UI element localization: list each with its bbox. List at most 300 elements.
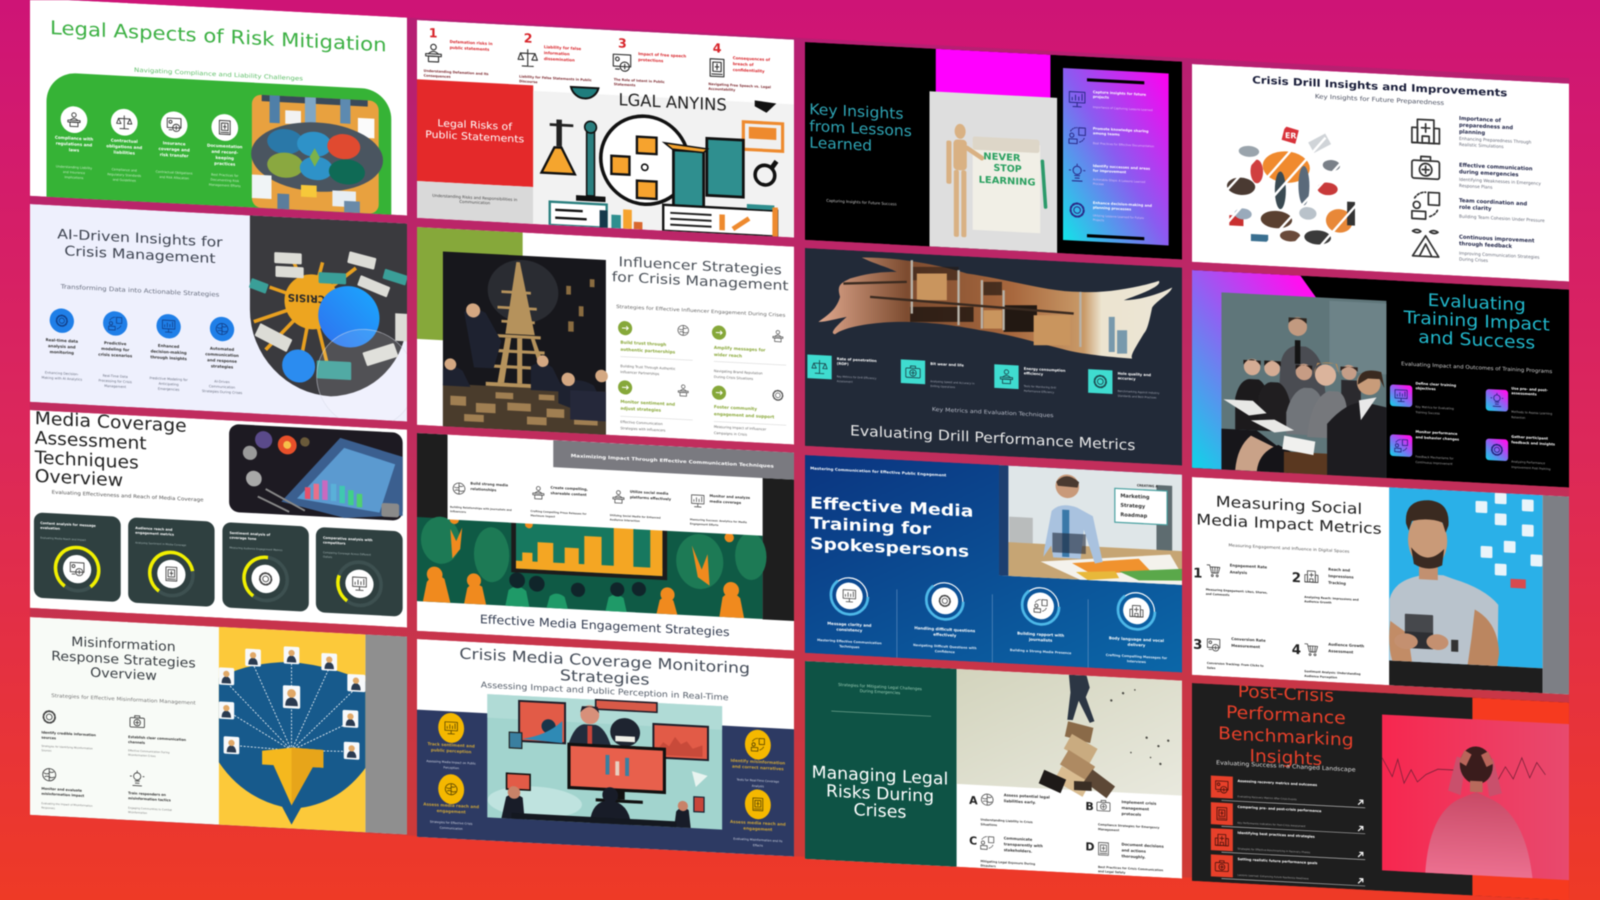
metric descriptions: Performance Efficiency [1024, 389, 1055, 394]
descriptions: Processing for Crisis [98, 379, 132, 384]
metric headings: Energy consumption [1024, 367, 1066, 373]
descriptions: Engagement Efforts [690, 522, 719, 527]
card: sentiment analysis: coverage tone [229, 536, 257, 541]
numbered headings: Navigating Free Speech vs. Legal [708, 82, 771, 89]
headings [1415, 381, 1555, 447]
headings: and actions [1122, 848, 1147, 854]
numbered headings: breach of [733, 61, 754, 67]
gradient list panel: projects [1093, 95, 1109, 100]
title: and Success [1418, 328, 1535, 354]
labels: Build trust through [620, 340, 666, 347]
labels: effectively [933, 632, 957, 638]
card: audience reach: Analyzing Sentiment in Media Coverage [135, 540, 187, 547]
photo: seated trainees [1221, 292, 1386, 478]
illustration: fragmented emergency scene [1216, 112, 1369, 266]
illustration: audience watching chart [417, 513, 767, 619]
gradient icon tiles [1390, 384, 1508, 462]
descriptions: Misinformation [128, 810, 147, 815]
funnel network graphic [219, 627, 365, 832]
card: comparative analysis [316, 527, 403, 617]
card: audience reach: Audience reach and [135, 526, 173, 532]
descriptions: and Legal Safety [1098, 869, 1125, 875]
gradient list panel: Importance of Capturing Lessons Learned [1093, 105, 1153, 112]
descriptions: Audience Perception [1304, 674, 1337, 680]
numbered headings: public statements [450, 45, 490, 52]
descriptions: Continuous Improvement [1415, 460, 1454, 466]
descriptions: Tools for Real-Time Coverage [736, 777, 779, 784]
title: Benchmarking [1218, 724, 1354, 751]
descriptions: Anticipating [159, 382, 179, 387]
numbered headings: Discourse [519, 79, 538, 84]
panel: Misinformation Response Strategies Overview [30, 617, 407, 835]
photo: never stop learning [929, 91, 1057, 253]
labels: consistency [836, 627, 863, 633]
descriptions: Confidence [935, 649, 956, 654]
labels: modeling for [101, 346, 129, 352]
card: comparative analysis: Comparing Coverage Across Different [323, 550, 371, 557]
icons [57, 314, 228, 336]
labels: Body language and vocal [1109, 635, 1165, 643]
headings: objectives [1415, 386, 1436, 391]
descriptions: Responses [41, 805, 56, 810]
descriptions: Evaluating Recovery Metrics After Crisis Events [1238, 794, 1297, 801]
photo: toppling brick stack [957, 669, 1182, 802]
descriptions: Situations [981, 822, 997, 827]
labels: communication [205, 351, 239, 358]
headings [470, 481, 751, 506]
photo: never stop learning: NEVER [983, 151, 1021, 164]
illustration: legal anyins: LGAL ANYINS [618, 90, 727, 115]
descriptions: Strategies for Effective Crisis [430, 820, 473, 826]
labels: Enhanced [158, 343, 180, 349]
numbered headings: Impact of free speech [638, 51, 686, 59]
title [57, 227, 223, 268]
labels: Identify misinformation [731, 758, 785, 766]
arrows [622, 326, 722, 395]
labels: and record- [211, 149, 238, 155]
panel: Post-Crisis Performance Benchmarking Insights [1192, 679, 1569, 900]
headings: media coverage [710, 499, 742, 505]
labels [620, 340, 774, 419]
labels: delivery [1128, 642, 1146, 648]
panel: Effective Media Training for Spokespersons [805, 455, 1182, 673]
descriptions: Evaluating the Impact of Misinformation [41, 801, 93, 808]
icons [43, 711, 144, 786]
headings: Continuous improvement [1459, 234, 1535, 244]
card: comparative analysis: Outlets [323, 555, 333, 559]
card: audience reach [128, 517, 215, 607]
headings: Monitor and analyze [710, 494, 751, 500]
descriptions [620, 364, 767, 438]
green title panel: Strategies for Mitigating Legal Challenges [838, 682, 922, 691]
labels: regulations and [56, 141, 92, 148]
numbered headings: Liability for False Statements in Public [519, 75, 592, 82]
descriptions: Retention [1511, 415, 1526, 420]
labels [55, 135, 243, 167]
subtitle: Key Insights for Future Preparedness [1315, 93, 1444, 107]
metric headings [837, 357, 1151, 382]
photo: man with tablet [1389, 487, 1543, 693]
headings: Assessing recovery metrics and outcomes [1238, 779, 1317, 787]
descriptions: Sentiment Analysis: Understanding [1304, 669, 1360, 676]
gradient list panel: Best Practices for Effective Documentation [1093, 141, 1154, 148]
descriptions: During Crisis Situations [714, 375, 753, 381]
headings: Comparing pre- and post-crisis performance [1238, 805, 1322, 813]
title: Influencer Strategies [618, 255, 782, 279]
descriptions: Effective Communication During [128, 748, 170, 754]
headings: assessments [1511, 391, 1537, 397]
orange block [1472, 698, 1569, 900]
numbered headings: Consequences of [733, 55, 770, 62]
green title panel [805, 661, 957, 867]
headings: Establish clear communication [128, 735, 187, 742]
headings: Conversion Rate [1231, 637, 1266, 643]
descriptions: Influencers [450, 509, 466, 514]
headings: Assessment [1328, 649, 1354, 654]
headings [1004, 793, 1164, 861]
labels: Monitor sentiment and [620, 399, 675, 407]
title [34, 409, 187, 495]
panel: Managing Legal Risks During Crises [805, 661, 1182, 879]
descriptions: Management Efforts [209, 183, 241, 188]
descriptions: Feedback Mechanisms for [1415, 455, 1454, 461]
title [1196, 492, 1382, 538]
green title panel: Crises [853, 799, 907, 822]
icons [68, 113, 230, 135]
labels: Message clarity and [827, 621, 872, 628]
red title block: Communication [459, 199, 491, 205]
title: Evaluating [1428, 291, 1526, 316]
numbers: 3 [1193, 638, 1202, 653]
descriptions: Improving Communication Strategies [1459, 251, 1540, 261]
title: Training Impact [1403, 308, 1550, 336]
descriptions: Real-Time Data [103, 374, 128, 379]
headings: Impressions [1328, 574, 1354, 580]
headings: Gather participant [1511, 435, 1548, 441]
labels: Insurance [163, 140, 186, 146]
gradient list panel: Enhance decision-making and [1093, 201, 1152, 208]
headings: Monitor and evaluate [41, 787, 83, 793]
numbers: 4 [1292, 643, 1301, 658]
descriptions: and Comments [1206, 592, 1230, 597]
descriptions: Mastering Effective Communication [817, 638, 882, 645]
metric descriptions: Key Metrics for Drill Efficiency [837, 374, 877, 380]
letters [969, 794, 1095, 854]
title [1218, 681, 1354, 772]
descriptions: Emergencies [158, 387, 180, 392]
headings: Setting realistic future performance goals [1238, 857, 1317, 865]
numbered headings: Consequences [424, 74, 451, 79]
subtitle: Capturing Insights for Future Success [826, 199, 897, 206]
labels: liabilities [114, 150, 135, 156]
descriptions: Contractual Obligations [156, 170, 193, 176]
title: Strategies [560, 666, 650, 689]
descriptions: and Risk Allocation [159, 175, 189, 180]
title: Performance [1226, 703, 1346, 729]
photo: man at roadmap [999, 465, 1182, 585]
numbered headings: information [544, 50, 570, 56]
gradient list panel: Process [1093, 182, 1104, 186]
gradient list panel: Projects [1093, 218, 1105, 222]
labels: engagement [743, 826, 772, 832]
panel: AI-Driven Insights for Crisis Management [30, 204, 415, 430]
descriptions: Enhancing Preparedness Through [1459, 136, 1532, 146]
navy band [417, 710, 794, 857]
descriptions: During Crises [1459, 256, 1489, 264]
title: Spokespersons [810, 534, 969, 561]
labels: Automated [210, 346, 234, 352]
title: Effective Media [810, 493, 973, 521]
card: sentiment analysis: Measuring Audience Engagement Metrics [229, 545, 283, 552]
numbered headings: 1 [429, 25, 438, 41]
title [809, 100, 912, 157]
photo: man at roadmap: Roadmap [1120, 512, 1148, 520]
gradient list panel: Capture insights for future [1093, 90, 1147, 97]
descriptions: Communication [440, 826, 463, 831]
panel: Legal Aspects of Risk Mitigation [30, 0, 407, 248]
headings: Effective communication [1459, 163, 1533, 172]
kicker: Mastering Communication for Effective Public Engagement [810, 466, 947, 477]
descriptions: Mitigating Legal Exposure During [981, 859, 1035, 866]
descriptions: and Guidelines [113, 178, 136, 183]
numbered headings: The Role of Intent in Public [614, 77, 665, 84]
numbered headings: Liability for false [544, 44, 582, 51]
metric headings: accuracy [1118, 376, 1136, 381]
labels [46, 337, 239, 370]
descriptions: Measuring Impact of Influencer [714, 425, 767, 432]
labels: adjust strategies [620, 406, 662, 413]
descriptions: Compliance and [112, 167, 137, 173]
tile icons [1395, 388, 1503, 457]
labels: Amplify messages for [714, 345, 766, 353]
headings: Create compelling, [551, 486, 588, 492]
headings: relationships [470, 487, 496, 492]
letters: A [969, 794, 978, 807]
subtitle: Evaluating Success in a Changed Landscape [1216, 760, 1356, 774]
title [459, 644, 750, 694]
headings: Use pre- and post- [1511, 386, 1548, 392]
descriptions: Enhancing Decision- [45, 371, 80, 376]
labels: Track sentiment and [428, 741, 475, 749]
labels: authentic partnerships [620, 347, 676, 355]
card: content analysis [34, 512, 121, 602]
descriptions [426, 759, 783, 849]
descriptions: Analysis [752, 784, 764, 788]
labels [423, 741, 786, 833]
title: Learned [809, 133, 872, 155]
title: from Lessons [809, 117, 912, 140]
descriptions [981, 816, 1163, 877]
metric descriptions: Analyzing Speed and Accuracy in [930, 379, 975, 385]
descriptions: Documenting Risk [211, 178, 239, 183]
labels: Handling difficult questions [914, 625, 976, 633]
title: for Crisis Management [612, 270, 788, 294]
metric icons [812, 360, 1106, 389]
green title panel: Managing Legal [812, 762, 948, 789]
photo: never stop learning: LEARNING [979, 175, 1036, 189]
panel: Influencer Strategies for Crisis Management [417, 227, 794, 445]
labels: journalists [1028, 637, 1053, 643]
headings: and behavior changes [1415, 435, 1459, 442]
descriptions: Understanding Liability in Crisis [981, 818, 1033, 824]
title: Overview [90, 666, 157, 684]
labels: coverage and [158, 146, 190, 153]
gradient list panel: Promote knowledge sharing [1093, 127, 1149, 134]
white strategy panel [448, 435, 763, 536]
descriptions: Measuring Engagement: Likes, Shares, [1206, 587, 1268, 595]
descriptions: Audience Growth [1304, 599, 1331, 605]
descriptions: Interviews [1127, 659, 1146, 664]
headings: planning [1459, 129, 1485, 137]
labels: engagement and support [714, 411, 774, 419]
numbers: 2 [1292, 571, 1301, 586]
red title block [417, 79, 533, 224]
panel: Evaluating Training Impact and Success [1192, 270, 1569, 488]
panel: Evaluating Drill Performance Metrics [805, 238, 1182, 466]
labels: and correct narratives [732, 764, 784, 771]
headings: through feedback [1459, 241, 1513, 250]
metric descriptions: Tools for Monitoring Drill [1024, 384, 1056, 390]
headings: Communicate [1004, 836, 1033, 842]
descriptions: Understanding Liability [56, 164, 92, 170]
headings: during emergencies [1459, 169, 1519, 178]
headings: misinformation tactics [128, 796, 171, 802]
labels: Real-time data [46, 337, 78, 344]
gradient list panel: for improvement [1093, 169, 1126, 174]
labels: Assess media reach and [423, 801, 479, 809]
gradient list panel: planning processes [1093, 206, 1131, 212]
labels: monitoring [50, 349, 74, 355]
grey heading band: Maximizing Impact Through Effective Communication Techniques [571, 453, 774, 470]
headings: transparently with [1004, 842, 1043, 848]
descriptions [56, 164, 241, 188]
grey strip [1543, 495, 1569, 695]
photo: man at roadmap: Strategy [1120, 503, 1146, 510]
headings: stakeholders. [1004, 848, 1033, 854]
descriptions: Management [104, 384, 127, 389]
photo: crisis hub and blue circles [249, 215, 415, 430]
card: comparative analysis: competitors [323, 540, 346, 546]
labels: Contractual [111, 138, 138, 144]
headings: Team coordination and [1459, 198, 1527, 208]
title [612, 255, 788, 294]
subtitle: Key Metrics and Evaluation Techniques [932, 407, 1054, 419]
labels: Documentation [207, 143, 243, 149]
descriptions [42, 370, 242, 395]
labels: Foster community [714, 404, 757, 411]
icon circles [50, 308, 234, 342]
magenta block [936, 49, 1050, 106]
labels: decision-making [151, 348, 187, 355]
numbered headings: 2 [524, 30, 533, 46]
card: audience reach: engagement metrics [135, 531, 174, 537]
photo: never stop learning: STOP [993, 163, 1022, 175]
title: Training for [810, 513, 931, 539]
icon row [61, 106, 238, 142]
descriptions: Disasters [981, 863, 996, 868]
headings: preparedness and [1459, 123, 1513, 131]
descriptions: Analyzing Reach: Impressions and [1304, 595, 1359, 602]
headings: misinformation impact [41, 792, 85, 798]
descriptions: Misinformation Crises [128, 753, 156, 758]
letters: D [1085, 840, 1095, 854]
descriptions: Key Metrics for Evaluating [1415, 405, 1454, 411]
descriptions: AI-Driven [214, 379, 230, 384]
metric descriptions: Benchmarking Against Industry [1118, 389, 1160, 395]
labels: keeping [216, 155, 234, 161]
icons [1412, 119, 1439, 257]
panel: Crisis Drill Insights and Improvements [1192, 64, 1569, 282]
subtitle: Strategies for Effective Influencer Engagement During Crises [616, 304, 786, 319]
descriptions: Building a Strong Media Presence [1010, 648, 1072, 655]
descriptions: Training Success [1414, 410, 1440, 415]
descriptions: Crafting Compelling Press Releases for [530, 509, 587, 516]
photo: man at roadmap: Marketing [1120, 493, 1150, 501]
descriptions [1459, 136, 1545, 267]
title: Media Impact Metrics [1196, 510, 1382, 538]
red title block: Public Statements [425, 129, 524, 146]
labels: Building rapport with [1017, 630, 1064, 638]
column dividers [897, 589, 1088, 668]
card: content analysis: Content analysis for message [40, 521, 97, 528]
headings: Measurement [1231, 644, 1260, 649]
descriptions: Improvement Post-Training [1511, 465, 1551, 471]
gradient list panel: Identify successes and areas [1093, 164, 1150, 171]
labels: crisis scenarios [98, 352, 133, 358]
title: Overview [35, 467, 123, 491]
descriptions: Lessons Learned: Enhancing Future Resilience Readiness [1238, 873, 1309, 881]
headings: Identifying best practices and strategies [1238, 831, 1315, 839]
labels: and response [207, 357, 237, 364]
green accent block [417, 227, 523, 344]
descriptions: Making with AI Analytics [42, 376, 82, 382]
descriptions: Perception [443, 765, 459, 770]
green panel [46, 72, 391, 247]
descriptions [1238, 794, 1311, 881]
illustration: legal anyins [533, 85, 794, 238]
headings: shareable content [551, 491, 587, 497]
photo: stressed man before chart [1382, 714, 1569, 880]
descriptions: Navigating Difficult Questions with [913, 643, 977, 650]
yellow icon badges [438, 712, 771, 821]
descriptions: Key Performance Indicators for Post-Crisis Assessment [1238, 821, 1306, 828]
red icon squares [1211, 775, 1233, 878]
title: Post-Crisis [1238, 682, 1334, 707]
descriptions: Management [1098, 827, 1120, 832]
green title panel: During Emergencies [860, 688, 900, 695]
metric descriptions [837, 374, 1160, 400]
descriptions: Response Plans [1459, 183, 1493, 191]
panel: Measuring Social Media Impact Metrics [1192, 477, 1569, 695]
headings: Implement crisis [1122, 800, 1157, 806]
arrows [1358, 800, 1363, 884]
descriptions: Engaging Communities to Combat [128, 806, 172, 812]
headings: platforms effectively [630, 495, 672, 501]
title: Crisis Management [64, 244, 216, 267]
descriptions: Methods to Assess Learning [1511, 410, 1552, 416]
headings: Document decisions [1122, 843, 1164, 849]
headings: liabilities early. [1004, 799, 1037, 805]
labels: laws [69, 147, 80, 153]
subtitle: Strategies for Effective Misinformation Management [51, 693, 196, 707]
grey strip [365, 634, 407, 835]
metric descriptions: Assessment [837, 379, 853, 384]
card: sentiment analysis: Sentiment analysis of [229, 531, 271, 537]
headings: Analysis [1230, 570, 1248, 575]
panel: Legal Risks of Public Statements [417, 20, 794, 238]
training icons [831, 577, 1155, 630]
title [51, 634, 196, 686]
